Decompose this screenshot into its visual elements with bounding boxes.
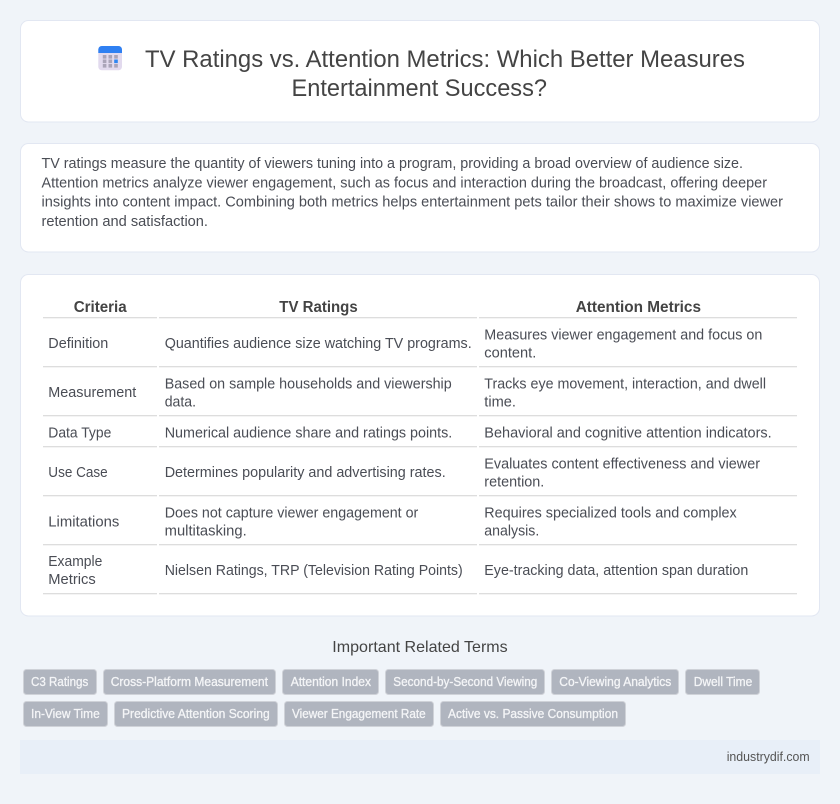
tag: Active vs. Passive Consumption: Active vs. Passive Consumption	[448, 707, 618, 721]
heading: important related terms: Important Related Terms	[332, 639, 508, 656]
row: data type: Numerical audience share and ratings points.	[165, 425, 452, 441]
panel: intro text: retention and satisfaction.	[42, 214, 208, 230]
title: TV Ratings vs. Attention Metrics: Which Better Measures	[145, 46, 745, 73]
tag: Active vs. Passive Consumption	[440, 702, 626, 726]
row: data type	[48, 425, 772, 441]
row: measurement: Based on sample households and viewership	[165, 376, 452, 392]
panel: header	[20, 20, 820, 122]
row: example metrics: Metrics	[48, 572, 96, 588]
tag: Cross-Platform Measurement: Cross-Platform Measurement	[111, 675, 268, 689]
row: use case: Determines popularity and advertising rates.	[165, 465, 446, 481]
footer: industrydif.com	[727, 749, 810, 764]
related term tags	[24, 670, 760, 726]
table header row: Criteria	[74, 299, 127, 316]
table header row	[74, 299, 701, 316]
row: limitations: multitasking.	[165, 523, 247, 539]
row: use case: retention.	[484, 474, 544, 490]
row: use case	[48, 456, 760, 490]
row: use case: Use Case	[48, 465, 108, 481]
row: measurement	[48, 376, 766, 410]
row: data type: Behavioral and cognitive attention indicators.	[484, 425, 772, 441]
panel: intro text: insights into content impact. Combining both metrics helps entertainment pets tailor their shows to maximize viewer	[42, 195, 783, 211]
row: measurement: data.	[165, 394, 196, 410]
row: example metrics: Eye-tracking data, attention span duration	[484, 563, 748, 579]
tag: Viewer Engagement Rate	[284, 702, 434, 726]
tag: C3 Ratings	[24, 670, 96, 694]
row: definition: Measures viewer engagement and focus on	[484, 327, 762, 343]
row: limitations	[48, 505, 737, 539]
row: example metrics: Nielsen Ratings, TRP (Television Rating Points)	[165, 563, 463, 579]
panel: intro text: Attention metrics analyze viewer engagement, such as focus and interaction during the broadcast, offering deeper	[42, 175, 767, 191]
tag: Dwell Time: Dwell Time	[694, 675, 752, 689]
title: Entertainment Success?	[292, 75, 547, 102]
row: limitations: Limitations	[48, 514, 119, 530]
tag: Predictive Attention Scoring: Predictive Attention Scoring	[122, 707, 270, 721]
tag: Co-Viewing Analytics	[552, 670, 678, 694]
table header row: TV Ratings	[279, 299, 358, 316]
title	[145, 46, 745, 102]
row: measurement: Measurement	[48, 385, 136, 401]
row: definition	[48, 327, 762, 361]
row: limitations: Does not capture viewer engagement or	[165, 505, 419, 521]
row: limitations: Requires specialized tools and complex	[484, 505, 737, 521]
panel: comparison table	[20, 274, 820, 616]
row: definition: Quantifies audience size watching TV programs.	[165, 336, 472, 352]
panel: intro text	[20, 144, 820, 252]
row: example metrics	[48, 554, 748, 588]
table header row: Attention Metrics	[576, 299, 701, 316]
tag: Predictive Attention Scoring	[114, 702, 278, 726]
tag: Cross-Platform Measurement	[104, 670, 276, 694]
row: measurement: Tracks eye movement, interaction, and dwell	[484, 376, 766, 392]
tag: Attention Index	[282, 670, 378, 694]
row: limitations: analysis.	[484, 523, 539, 539]
row: definition: content.	[484, 345, 536, 361]
row: definition: Definition	[48, 336, 108, 352]
tag: C3 Ratings: C3 Ratings	[31, 675, 88, 689]
icon: calendar	[98, 46, 122, 70]
tag: Attention Index: Attention Index	[291, 675, 372, 689]
tag: In-View Time: In-View Time	[31, 707, 100, 721]
tag: Viewer Engagement Rate: Viewer Engagement Rate	[292, 707, 426, 721]
tag: Second-by-Second Viewing	[386, 670, 544, 694]
row: use case: Evaluates content effectiveness and viewer	[484, 456, 760, 472]
row: example metrics: Example	[48, 554, 102, 570]
footer	[20, 740, 820, 774]
tag: Second-by-Second Viewing: Second-by-Second Viewing	[393, 675, 537, 689]
row: data type: Data Type	[48, 425, 111, 441]
tag: In-View Time	[24, 702, 108, 726]
panel: intro text: TV ratings measure the quantity of viewers tuning into a program, providing a broad overview of audience size.	[42, 156, 743, 172]
row: measurement: time.	[484, 394, 516, 410]
tag: Dwell Time	[686, 670, 760, 694]
tag: Co-Viewing Analytics: Co-Viewing Analytics	[559, 675, 671, 689]
